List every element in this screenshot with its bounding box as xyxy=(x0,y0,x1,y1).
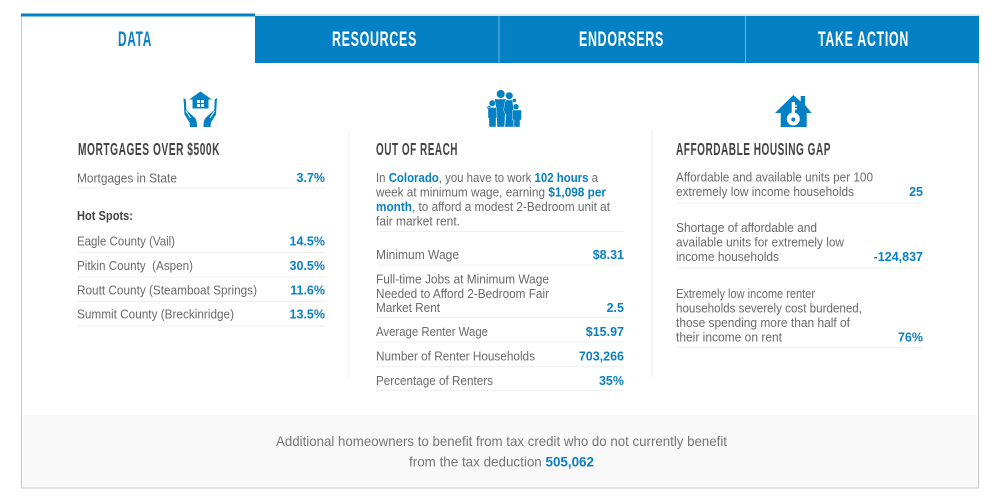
paragraph: month, to afford a modest 2-Bedroom unit at xyxy=(376,200,610,214)
row: shortage: income households xyxy=(676,250,779,264)
icon: hands holding house xyxy=(184,92,217,127)
row: eagle xyxy=(77,234,325,252)
heading: out of reach: OUT OF REACH xyxy=(376,139,458,159)
row: cost burdened xyxy=(676,287,923,348)
row: cost burdened: households severely cost burdened, xyxy=(676,302,862,316)
row: average renter wage: $15.97 xyxy=(586,325,624,339)
row: minimum wage xyxy=(376,248,624,265)
row: renter households: 703,266 xyxy=(579,350,624,364)
row: shortage xyxy=(676,221,923,268)
tabs xyxy=(21,14,979,63)
row: summit xyxy=(77,308,325,326)
tab: data: DATA xyxy=(118,28,152,51)
row: shortage: available units for extremely low xyxy=(676,236,845,250)
row: units per 100: Affordable and available units per 100 xyxy=(676,170,873,184)
row: routt xyxy=(77,284,325,302)
row: full-time jobs xyxy=(376,272,624,318)
row: cost burdened: those spending more than half of xyxy=(676,316,850,330)
row: mortgages in state: Mortgages in State xyxy=(77,172,177,186)
row: eagle: Eagle County (Vail) xyxy=(77,234,175,248)
tab: endorsers: ENDORSERS xyxy=(579,28,664,51)
row: full-time jobs: 2.5 xyxy=(607,301,624,315)
row: minimum wage: $8.31 xyxy=(593,248,624,262)
paragraph: week at minimum wage, earning $1,098 per xyxy=(375,186,606,200)
subheading: hot spots: Hot Spots: xyxy=(77,209,133,223)
footer text: from the tax deduction 505,062 xyxy=(409,454,594,470)
footer band xyxy=(22,415,978,488)
row: pitkin xyxy=(77,259,325,277)
row: mortgages in state: 3.7% xyxy=(296,171,325,185)
row: summit: Summit County (Breckinridge) xyxy=(77,308,234,322)
panel: mortgages xyxy=(77,139,325,326)
row: eagle: 14.5% xyxy=(290,234,325,248)
icon: house with key xyxy=(775,95,812,127)
row: summit: 13.5% xyxy=(290,308,325,322)
panel: out of reach xyxy=(375,139,624,390)
tab: resources: RESOURCES xyxy=(332,28,417,51)
row: shortage: Shortage of affordable and xyxy=(676,221,817,235)
row: full-time jobs: Market Rent xyxy=(376,301,440,315)
row: percentage of renters: Percentage of Renters xyxy=(376,374,493,388)
row: average renter wage: Average Renter Wage xyxy=(376,325,488,339)
row: percentage of renters: 35% xyxy=(599,374,624,388)
footer text: Additional homeowners to benefit from tax credit who do not currently benefit xyxy=(276,433,727,449)
row: minimum wage: Minimum Wage xyxy=(376,248,459,262)
row: routt: 11.6% xyxy=(290,284,325,298)
row: full-time jobs: Full-time Jobs at Minimum Wage xyxy=(376,272,549,286)
paragraph: In Colorado, you have to work 102 hours a xyxy=(376,171,598,185)
row: percentage of renters xyxy=(376,374,624,390)
row: units per 100: 25 xyxy=(909,185,923,199)
row: renter households: Number of Renter Households xyxy=(376,350,535,364)
row: cost burdened: 76% xyxy=(898,330,923,344)
tab: take action: TAKE ACTION xyxy=(818,28,909,51)
panel: affordable housing gap xyxy=(676,139,923,348)
footer text xyxy=(276,433,727,470)
paragraph: fair market rent. xyxy=(376,214,460,228)
row: cost burdened: their income on rent xyxy=(676,330,782,344)
icon: family xyxy=(487,90,522,127)
heading: mortgages over $500k: MORTGAGES OVER $500K xyxy=(78,139,220,159)
paragraph xyxy=(375,171,624,232)
row: cost burdened: Extremely low income renter xyxy=(676,287,815,301)
row: average renter wage xyxy=(376,325,624,342)
dividers xyxy=(349,131,652,377)
row: pitkin: Pitkin County (Aspen) xyxy=(77,259,193,273)
heading: affordable housing gap: AFFORDABLE HOUSING GAP xyxy=(676,139,831,159)
row: shortage: -124,837 xyxy=(874,250,923,264)
row: mortgages in state xyxy=(77,171,325,188)
row: full-time jobs: Needed to Afford 2-Bedroom Fair xyxy=(376,287,549,301)
row: units per 100 xyxy=(676,170,923,203)
row: routt: Routt County (Steamboat Springs) xyxy=(77,284,257,298)
row: renter households xyxy=(376,350,624,366)
row: pitkin: 30.5% xyxy=(290,259,325,273)
row: units per 100: extremely low income households xyxy=(676,185,854,199)
